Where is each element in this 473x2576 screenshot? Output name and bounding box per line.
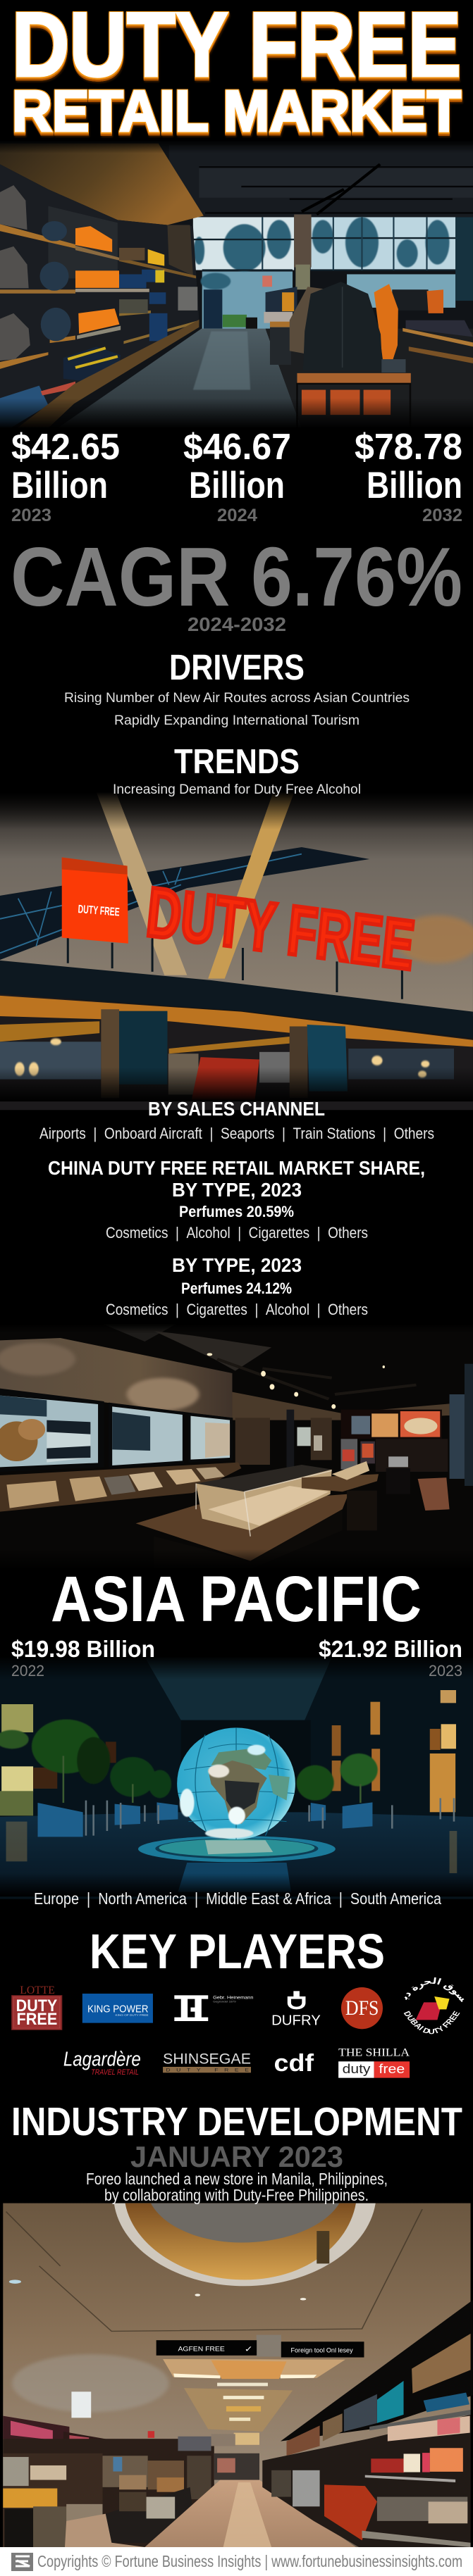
segment: China by type: BY TYPE, 2023 bbox=[172, 1179, 302, 1201]
logo: The Shilla: free bbox=[379, 2061, 405, 2076]
logo: Lotte Duty Free: DUTY bbox=[16, 1996, 57, 2015]
logo: Lagardere: TRAVEL RETAIL bbox=[91, 2068, 139, 2077]
logo: Gebr. Heinemann: Gegründet 1879 bbox=[213, 2000, 236, 2003]
wall bbox=[0, 1338, 232, 1418]
logo: Gebr. Heinemann: Gebr. Heinemann bbox=[213, 1994, 253, 2000]
right lit windows bbox=[332, 1690, 456, 1812]
segment: China by type: Perfumes 20.59% bbox=[179, 1203, 294, 1220]
logo: The Shilla: duty bbox=[343, 2061, 371, 2076]
region stat 2023 bbox=[319, 1636, 462, 1680]
segment: by sales channel: BY SALES CHANNEL bbox=[148, 1098, 325, 1120]
logo: DFS bbox=[341, 1987, 383, 2029]
trends bbox=[113, 743, 361, 797]
right shelves bbox=[262, 2393, 471, 2547]
photo fades bbox=[0, 792, 473, 830]
key players heading: KEY PLAYERS bbox=[90, 1924, 385, 1979]
region stat 2022: 2022 bbox=[11, 1662, 44, 1680]
logo: Dubai Duty Free: السوق الحرة دبي bbox=[405, 1977, 464, 2002]
logo: Lotte Duty Free: FREE bbox=[17, 2009, 57, 2028]
footer logo mark bbox=[16, 2556, 30, 2566]
plants bbox=[0, 1720, 378, 1801]
floor bbox=[45, 329, 305, 437]
red sign box: DUTY FREE bbox=[78, 903, 120, 919]
photo: airport duty free hall bbox=[3, 2203, 473, 2548]
photo: digital globe atrium bbox=[0, 1656, 473, 1899]
segment: China by type bbox=[48, 1157, 425, 1242]
wall screens bbox=[0, 1389, 104, 1472]
left shelving wall bbox=[0, 164, 199, 437]
logo: Shinsegae bbox=[163, 2051, 251, 2072]
track lights bbox=[217, 1359, 417, 1399]
back menu boards bbox=[341, 1410, 442, 1439]
drivers bbox=[64, 647, 410, 728]
left lit windows bbox=[0, 1704, 116, 1815]
photo fades bbox=[0, 1873, 473, 1896]
region stat 2022 bbox=[11, 1636, 155, 1680]
soffit and shop front bbox=[0, 994, 473, 1110]
red sign box bbox=[62, 858, 128, 944]
logo: Gebr. Heinemann bbox=[174, 1994, 253, 2021]
development text bbox=[86, 2170, 388, 2204]
development date: JANUARY 2023 bbox=[130, 2140, 343, 2173]
key player logos bbox=[11, 1977, 464, 2078]
central display counter bbox=[136, 1494, 348, 1561]
region stat 2023: $21.92 Billion bbox=[319, 1636, 462, 1662]
title bbox=[12, 0, 461, 144]
roof truss bbox=[0, 847, 369, 960]
logo: Shinsegae: DUTY FREE bbox=[166, 2067, 249, 2072]
logo: Dufry: DUFRY bbox=[271, 2012, 321, 2029]
stat: 2032 bbox=[355, 427, 462, 525]
development text: Foreo launched a new store in Manila, Philippines, bbox=[86, 2170, 388, 2188]
logo: King Power: KING OF DUTY FREE bbox=[115, 2014, 149, 2017]
fascia band bbox=[0, 961, 473, 1038]
drivers: Rapidly Expanding International Tourism bbox=[114, 713, 360, 728]
segment: by type bbox=[106, 1254, 368, 1318]
globe bbox=[177, 1727, 295, 1839]
segment: China by type: Cosmetics | Alcohol | Cigarettes | Others bbox=[106, 1224, 368, 1242]
ceiling dome bbox=[114, 2203, 376, 2286]
logo: Lotte Duty Free: LOTTE bbox=[20, 1984, 55, 1996]
stat: 2023: Billion bbox=[11, 465, 108, 506]
segment: by sales channel bbox=[39, 1098, 434, 1142]
left shelves bbox=[3, 2416, 235, 2548]
logo: cdf: cdf bbox=[274, 2050, 314, 2077]
atrium floor bbox=[0, 1812, 473, 1896]
logo: DFS: DFS bbox=[345, 1997, 379, 2020]
white panel bbox=[71, 2391, 91, 2418]
wood counter bbox=[6, 320, 199, 437]
photo fades bbox=[0, 1549, 473, 1570]
right dark upper wall bbox=[281, 2300, 473, 2441]
hanging signs: Foreign tool Onl lesey bbox=[290, 2347, 354, 2354]
floor aisle bbox=[145, 2480, 356, 2547]
logo: King Power: KING POWER bbox=[87, 2003, 149, 2015]
right merchandise bbox=[266, 287, 297, 315]
region stat 2023: 2023 bbox=[429, 1662, 462, 1680]
ceiling light panels bbox=[163, 2359, 345, 2445]
photo: duty free store interior bbox=[0, 139, 473, 439]
logo: Shinsegae: SHINSEGAE bbox=[163, 2051, 251, 2068]
region heading: ASIA PACIFIC bbox=[51, 1563, 422, 1635]
logo: Dubai Duty Free bbox=[403, 1977, 464, 2034]
development text: by collaborating with Duty-Free Philippines. bbox=[104, 2186, 369, 2204]
logo: Lagardere: Lagardère bbox=[63, 2047, 141, 2070]
logo: Lotte Duty Free bbox=[12, 1984, 62, 2030]
stat: 2023 bbox=[11, 427, 120, 525]
segment: by type: BY TYPE, 2023 bbox=[172, 1254, 302, 1276]
trends: TRENDS bbox=[174, 743, 300, 781]
footer logo bbox=[11, 2553, 33, 2571]
logo: Dufry bbox=[271, 1991, 321, 2029]
stat: 2023: $42.65 bbox=[11, 427, 120, 468]
ceiling beams bbox=[97, 792, 187, 975]
title: RETAIL MARKET bbox=[12, 78, 461, 144]
wall jackets bbox=[0, 185, 30, 361]
hanging signs: AGFEN FREE bbox=[178, 2346, 225, 2353]
stat: 2032: $78.78 bbox=[355, 427, 462, 468]
wood shelf with trays bbox=[0, 1463, 241, 1512]
hanging signs: ✓ bbox=[245, 2344, 253, 2353]
ceiling ducts bbox=[102, 1324, 176, 1342]
trends: Increasing Demand for Duty Free Alcohol bbox=[113, 782, 361, 797]
CAGR: 2024-2032 bbox=[188, 613, 286, 635]
segment: by type: Cosmetics | Cigarettes | Alcohol | Others bbox=[106, 1301, 368, 1318]
stat: 2032: 2032 bbox=[422, 506, 462, 525]
footer band bbox=[0, 2547, 473, 2576]
photo: duty free sign bbox=[0, 792, 473, 1110]
orange goods bbox=[75, 226, 119, 334]
segment: by type: Perfumes 24.12% bbox=[181, 1280, 292, 1297]
stat: 2024: Billion bbox=[189, 465, 285, 506]
lights bbox=[15, 1038, 429, 1077]
holographic base bbox=[138, 1836, 336, 1892]
photo: food retail counter bbox=[0, 1324, 473, 1570]
logo: The Shilla: THE SHILLA bbox=[338, 2046, 410, 2058]
stat: 2024: $46.67 bbox=[183, 427, 291, 468]
segment: China by type: CHINA DUTY FREE RETAIL MARKET SHARE, bbox=[48, 1157, 425, 1179]
logo: King Power bbox=[82, 1994, 153, 2023]
planters bbox=[37, 1802, 372, 1837]
region stat 2022: $19.98 Billion bbox=[11, 1636, 155, 1662]
drivers: DRIVERS bbox=[169, 647, 305, 687]
logo: Dubai Duty Free: DUBAI DUTY FREE bbox=[403, 2011, 460, 2034]
stat: 2023: 2023 bbox=[11, 506, 51, 525]
logo: Lagardere bbox=[63, 2047, 141, 2077]
photo fades bbox=[0, 139, 473, 153]
wood ceiling bbox=[0, 144, 204, 225]
stat: 2024 bbox=[183, 427, 291, 525]
black jacket bbox=[303, 282, 383, 370]
stat: 2024: 2024 bbox=[217, 506, 257, 525]
drivers: Rising Number of New Air Routes across Asian Countries bbox=[64, 691, 410, 706]
hanging signs bbox=[156, 2335, 364, 2358]
logo: The Shilla bbox=[338, 2046, 410, 2078]
